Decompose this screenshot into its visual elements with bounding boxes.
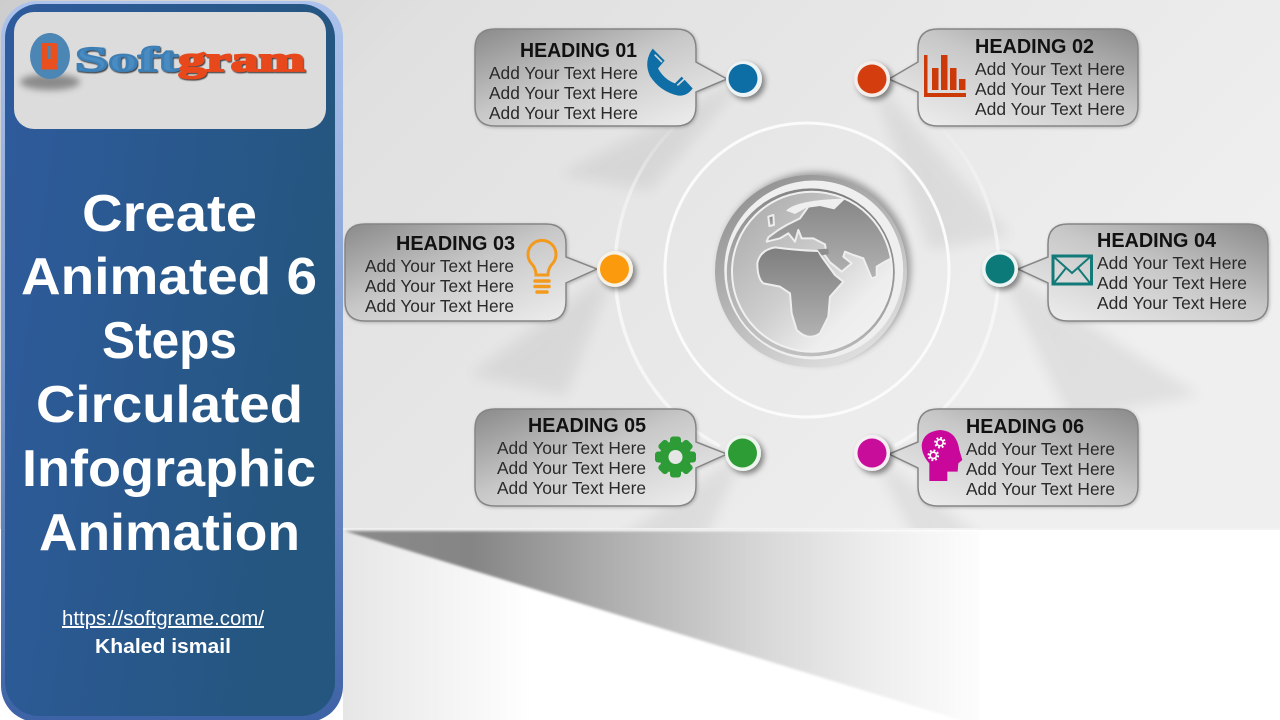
body text: Add Your Text Here: [497, 478, 646, 498]
step dot: [726, 61, 762, 97]
body text: [489, 63, 638, 123]
left title panel: [1, 1, 343, 720]
title: Animated 6: [21, 248, 317, 306]
speech bubble: [889, 29, 1138, 126]
icon: head with gears: [922, 430, 962, 481]
title: Create: [82, 185, 257, 243]
body text: Add Your Text Here: [975, 79, 1125, 99]
heading: HEADING 04: [1097, 230, 1217, 252]
body text: Add Your Text Here: [975, 99, 1125, 119]
step dot: [854, 435, 890, 471]
logo wordmark: [75, 40, 305, 79]
icon: envelope: [1053, 256, 1092, 284]
body text: [1097, 253, 1247, 313]
heading: HEADING 05: [528, 415, 646, 437]
heading: HEADING 02: [975, 36, 1094, 58]
body text: [497, 438, 646, 498]
logo card: [14, 12, 326, 129]
body text: [975, 59, 1125, 119]
title: [21, 185, 317, 562]
callout: heading 03: [345, 224, 633, 321]
logo wordmark: Soft: [75, 40, 179, 79]
callout: heading 01: [475, 29, 762, 126]
body text: Add Your Text Here: [966, 439, 1115, 459]
icon: phone: [647, 49, 693, 96]
heading: HEADING 03: [396, 233, 515, 255]
icon: gear: [655, 436, 696, 478]
body text: Add Your Text Here: [966, 479, 1115, 499]
body text: Add Your Text Here: [1097, 273, 1247, 293]
body text: Add Your Text Here: [1097, 293, 1247, 313]
body text: Add Your Text Here: [497, 458, 646, 478]
icon: bar chart: [924, 55, 966, 97]
author name: Khaled ismail: [95, 636, 231, 658]
body text: [365, 256, 514, 316]
speech bubble: [1018, 224, 1268, 321]
body text: Add Your Text Here: [365, 256, 514, 276]
body text: Add Your Text Here: [497, 438, 646, 458]
heading: HEADING 06: [966, 416, 1084, 438]
body text: Add Your Text Here: [489, 83, 638, 103]
floor reflection wedge: [345, 531, 980, 720]
logo wordmark: gram: [178, 40, 305, 79]
callout: heading 06: [854, 409, 1138, 506]
step dot: [982, 251, 1018, 287]
speech bubble: [889, 409, 1138, 506]
body text: Add Your Text Here: [1097, 253, 1247, 273]
speech bubble: [475, 29, 727, 126]
continents: [756, 198, 890, 336]
callout: heading 05: [475, 409, 761, 506]
website link: https://softgrame.com/: [62, 608, 264, 630]
step dot: [854, 61, 890, 97]
concentric rings: [615, 122, 999, 446]
logo mark: [20, 33, 80, 90]
callout: heading 02: [854, 29, 1138, 126]
globe emblem: [715, 172, 911, 367]
icon: light bulb: [528, 240, 556, 292]
body text: Add Your Text Here: [489, 103, 638, 123]
body text: [966, 439, 1115, 499]
title: Steps: [102, 312, 237, 370]
callout: heading 04: [982, 224, 1268, 321]
speech bubble: [475, 409, 727, 506]
step dot: [725, 435, 761, 471]
title: Animation: [39, 504, 300, 562]
heading: HEADING 01: [520, 40, 637, 62]
step dot: [597, 251, 633, 287]
title: Circulated: [36, 376, 303, 434]
body text: Add Your Text Here: [966, 459, 1115, 479]
body text: Add Your Text Here: [975, 59, 1125, 79]
body text: Add Your Text Here: [365, 296, 514, 316]
body text: Add Your Text Here: [365, 276, 514, 296]
body text: Add Your Text Here: [489, 63, 638, 83]
title: Infographic: [22, 440, 316, 498]
speech bubble: [345, 224, 597, 321]
